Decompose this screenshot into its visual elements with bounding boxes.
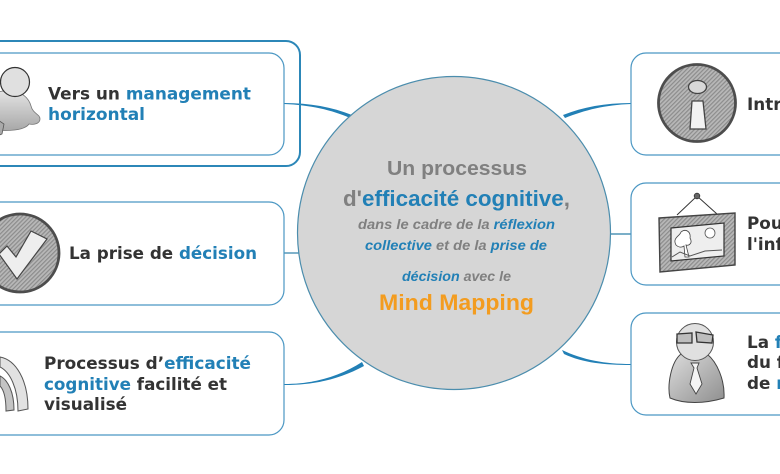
- text: processus heading: visualisé: [44, 394, 127, 414]
- text: central subtitle: collective et de la prise de: [365, 237, 544, 253]
- text: processus heading: cognitive facilité et: [44, 374, 227, 394]
- text: décision heading: La prise de décision: [69, 243, 257, 263]
- panel: selection frame around management: [0, 41, 300, 166]
- connector: facilitateur branch: [562, 350, 631, 365]
- text: central title: d'efficacité cognitive,: [343, 186, 570, 211]
- text: central subtitle: dans le cadre de la réflexion: [358, 216, 552, 232]
- icon: check mark badge: [0, 214, 59, 292]
- icon: concentric arcs: [0, 357, 28, 411]
- central circle: [298, 76, 610, 390]
- connector: processus branch: [284, 362, 364, 385]
- text: processus heading: Processus d’efficacité: [44, 353, 251, 373]
- connector: management branch: [284, 103, 352, 118]
- text: management heading: Vers un management: [48, 84, 250, 104]
- panel: information: [631, 183, 780, 285]
- text: central subtitle: décision avec le: [402, 268, 510, 284]
- icon: person: [0, 68, 40, 136]
- text: Mind Mapping: Mind Mapping: [379, 290, 534, 315]
- icon: man with glasses: [669, 324, 724, 402]
- connector: information branch: [608, 233, 631, 235]
- icon: information badge: [658, 64, 736, 142]
- panel: management: [0, 53, 284, 155]
- connector: intro branch: [563, 103, 631, 118]
- panel: processus: [0, 332, 284, 435]
- panel: décision: [0, 202, 284, 305]
- text: management heading: horizontal: [48, 104, 145, 124]
- panel: intro: [631, 53, 780, 155]
- text: central title: Un processus: [387, 157, 527, 180]
- panel: facilitateur: [631, 313, 780, 415]
- connector: décision branch: [284, 252, 300, 254]
- icon: framed picture: [659, 193, 735, 272]
